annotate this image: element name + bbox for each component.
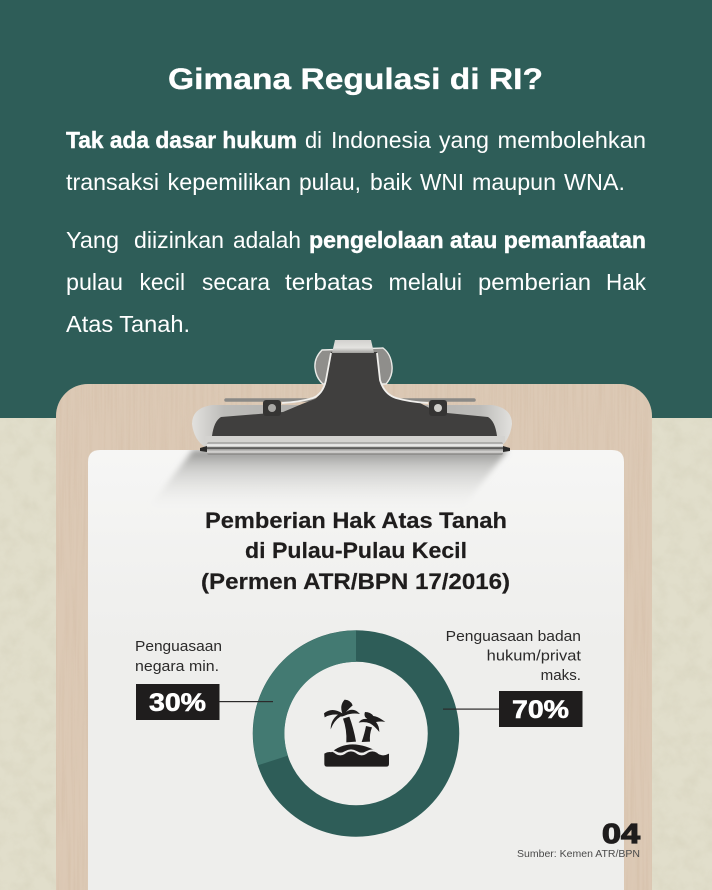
70% value: 70%	[512, 696, 569, 724]
text block: legal basis: WNA.	[564, 169, 625, 195]
label text: negara min.	[135, 658, 219, 675]
chart heading: di Pulau-Pulau Kecil	[245, 538, 467, 563]
icon: metal clip	[192, 340, 512, 454]
text block: legal basis: WNI	[420, 169, 464, 195]
text block: legal basis	[66, 127, 646, 195]
clip shadow on paper	[164, 450, 510, 493]
small palm trunk	[362, 726, 372, 742]
segment: 30% state	[253, 630, 356, 765]
70% value box	[499, 691, 582, 727]
text block: permitted management: pengelolaan atau pemanfaatan	[309, 227, 646, 253]
text block: permitted management: Hak	[606, 269, 646, 295]
label text: hukum/privat	[487, 648, 582, 664]
30% value box	[136, 684, 220, 720]
leader line	[219, 701, 273, 702]
chart heading: (Permen ATR/BPN 17/2016)	[201, 569, 510, 594]
clip lower plate	[192, 405, 512, 447]
text block: legal basis: baik	[370, 169, 412, 195]
large palm fronds	[324, 700, 360, 729]
clip chrome edges	[282, 353, 428, 403]
text block: legal basis: membolehkan	[498, 127, 646, 153]
text block: permitted management: terbatas	[285, 269, 373, 295]
source note: Sumber: Kemen ATR/BPN	[517, 848, 640, 860]
background: teal header	[0, 0, 712, 418]
chart heading: Pemberian Hak Atas Tanah	[205, 508, 507, 533]
label text: Penguasaan	[135, 638, 222, 655]
clip spring coil	[315, 348, 392, 384]
text block: permitted management	[66, 227, 646, 337]
text block: legal basis: yang	[439, 127, 489, 153]
chart heading	[201, 508, 510, 594]
clip top tab	[332, 340, 374, 353]
text block: legal basis: Indonesia	[331, 127, 431, 153]
label text	[446, 628, 582, 684]
clip wire	[226, 398, 474, 402]
text block: permitted management: secara	[202, 269, 270, 295]
text block: legal basis: di	[305, 127, 322, 153]
text block: permitted management: Yang	[66, 227, 119, 253]
donut chart	[253, 630, 444, 821]
text block: permitted management: pemberian	[478, 269, 591, 295]
icon: island with palm trees	[324, 700, 389, 767]
text block: permitted management: pulau	[66, 269, 123, 295]
clip right screw	[429, 400, 447, 416]
segment: 70% private	[268, 646, 444, 821]
text block: permitted management: adalah	[233, 227, 301, 253]
label text: maks.	[541, 667, 581, 684]
clipboard wood board	[56, 384, 652, 890]
text block: permitted management: melalui	[388, 269, 462, 295]
island water	[324, 752, 389, 767]
30% value: 30%	[149, 689, 206, 717]
text block: legal basis: Tak ada dasar hukum	[66, 127, 297, 153]
background: textured wall	[0, 418, 712, 890]
text block: legal basis: pulau,	[299, 169, 361, 195]
leader line	[443, 708, 499, 710]
text block: permitted management: kecil	[140, 269, 185, 295]
clip left screw	[263, 400, 281, 416]
text block: permitted management: Atas Tanah.	[66, 311, 190, 337]
title: Gimana Regulasi di RI?	[168, 63, 543, 96]
text block: legal basis: kepemilikan	[168, 169, 291, 195]
island hump	[330, 744, 381, 753]
label: private share	[443, 628, 582, 727]
label: state share	[135, 638, 273, 720]
large palm trunk	[343, 717, 356, 742]
text block: legal basis: maupun	[472, 169, 556, 195]
clipboard paper	[88, 450, 624, 890]
text block: permitted management: diizinkan	[134, 227, 224, 253]
text block: legal basis: transaksi	[66, 169, 159, 195]
small palm fronds	[359, 712, 385, 732]
clip roller	[200, 436, 510, 454]
island wave gap	[324, 750, 389, 754]
page number: 04	[602, 818, 641, 849]
label text: Penguasaan badan	[446, 628, 581, 645]
clip dark body	[212, 352, 497, 436]
panel: clipboard	[56, 384, 652, 890]
